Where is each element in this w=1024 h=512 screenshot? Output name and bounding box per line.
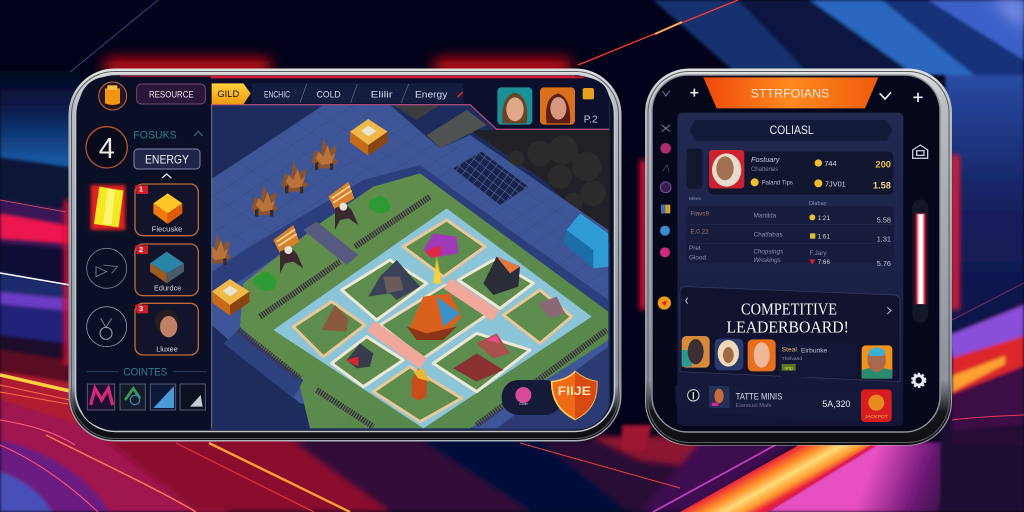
badge capsule (502, 380, 562, 415)
game map (205, 83, 610, 430)
energy button (134, 149, 200, 169)
leaderboard table: 7:66 (818, 259, 830, 266)
player detail card: unp (785, 365, 793, 371)
header banner: STTRFOIANS (751, 87, 829, 101)
counters heading: COINTES (123, 366, 167, 378)
leaderboard table: 5.76 (877, 259, 891, 268)
badge capsule: Guild (519, 402, 528, 406)
leaderboard table: Chatfabas (754, 231, 783, 238)
grass (240, 173, 608, 428)
avatar: player one (497, 87, 532, 125)
header banner (703, 77, 878, 108)
top player row: Fostuary (751, 155, 781, 164)
resource labels: COLD (317, 89, 341, 99)
top resource bar (211, 77, 609, 129)
gold tag: GILD (217, 89, 240, 99)
left colour bands (0, 70, 230, 512)
level circle (86, 127, 127, 168)
avatar: player two (540, 87, 575, 125)
top player row: 1.58 (873, 180, 891, 190)
main panel (660, 77, 928, 426)
player detail card: Eirbunke (801, 347, 828, 354)
glows (105, 60, 270, 72)
resource labels: ENCHIC (264, 89, 290, 99)
energy button: ENERGY (145, 153, 189, 167)
leaderboard table: 1:61 (818, 234, 830, 241)
header icons (662, 89, 923, 102)
card: hero: 3 (139, 304, 143, 313)
icon: yellow energy card (91, 185, 125, 230)
bottom colour fields (100, 435, 800, 512)
leaderboard table: Mites (689, 196, 701, 202)
blue block (567, 213, 608, 268)
leaderboard card: COMPETITIVE (741, 299, 837, 318)
icon: arrow circle (87, 248, 127, 288)
phone: right leaderboard (645, 68, 952, 446)
section title (689, 120, 892, 141)
leaderboard table: 1:21 (818, 215, 830, 222)
leaderboard table: Glood (689, 254, 706, 261)
blue floor (210, 105, 608, 428)
leaderboard table (687, 196, 894, 268)
focus label (133, 130, 203, 142)
leaderboard card: LEADERBOARD! (726, 317, 849, 336)
resource labels (264, 89, 448, 99)
resource labels: Energy (415, 89, 448, 99)
bottom player bar: Elanouel Mafs (736, 403, 772, 409)
fences (238, 197, 607, 427)
player detail card (779, 343, 857, 377)
left sidebar (78, 77, 212, 428)
screen (76, 74, 614, 432)
level circle: 4 (99, 133, 115, 165)
section title: COLIASL (770, 123, 814, 137)
card: resource: 1 (139, 185, 143, 194)
phone: left game screen (68, 68, 622, 442)
buildings (368, 260, 420, 300)
chests (350, 119, 388, 156)
lower wall (223, 330, 303, 398)
icon: settings gear (912, 374, 925, 387)
leaderboard table: Fiavs9 (690, 210, 709, 217)
gold tag (212, 83, 251, 104)
top player row: Paland Tips (762, 181, 793, 187)
bottom player bar: TATTE MINIS (736, 392, 782, 402)
pink crossroad (371, 283, 496, 363)
score text: P.2 (584, 114, 598, 125)
icon: hexagon badge (658, 296, 671, 310)
player detail card: Steal (782, 347, 797, 354)
bottom player bar: 5A,320 (822, 399, 850, 409)
bezel (645, 68, 952, 446)
leaderboard card (680, 287, 900, 382)
card: chest: 2 (139, 245, 143, 254)
fire shield (552, 372, 597, 419)
leaderboard table: Wnskings (753, 257, 782, 264)
top player row: 200 (875, 160, 891, 170)
card: hero (135, 303, 198, 355)
fire shield: FIIJE (558, 384, 591, 398)
bushes (368, 196, 390, 213)
focus label: FOSUKS (133, 130, 177, 142)
bottom player bar: JACKPOT (865, 414, 888, 420)
player detail card: Thrilvand (782, 356, 802, 362)
leaderboard table: E.0.22 (690, 229, 709, 236)
creatures (312, 138, 338, 170)
leaderboard table: 1.31 (877, 235, 891, 244)
leaderboard table: 5.58 (877, 216, 891, 225)
slider (912, 199, 928, 323)
resource pill: RESOURCE (149, 89, 194, 99)
top red rim (120, 76, 575, 78)
icon: ribbon circle (87, 307, 127, 347)
card: resource: Fiecuske (152, 224, 182, 233)
icon: home (913, 145, 928, 158)
side menu icons (660, 125, 671, 257)
leaderboard table: Dlabay (809, 201, 827, 207)
grid block (453, 152, 528, 205)
raised wall shadow (210, 165, 608, 318)
promo panel (658, 287, 925, 422)
top player row: Chatterles (751, 167, 778, 173)
stripe (680, 442, 879, 512)
player avatars (682, 336, 892, 379)
top player row (687, 149, 893, 194)
bottom player bar (676, 385, 892, 422)
paths (273, 208, 592, 428)
plots (293, 220, 572, 422)
gray bunker (427, 110, 487, 148)
icon: gold resource (99, 82, 127, 110)
resource pill (137, 84, 205, 104)
top player row: 7JV01 (825, 180, 846, 189)
card: chest (135, 244, 198, 296)
card: resource (135, 184, 198, 236)
leaderboard table: Pret (689, 245, 701, 252)
top player row: 744 (824, 159, 837, 168)
bezel (68, 68, 622, 442)
icon: gold medal (583, 88, 594, 99)
counters heading (87, 366, 206, 378)
leaderboard table: F.Jary (810, 250, 827, 257)
dark rubble (470, 130, 610, 243)
resource labels: Elilir (371, 89, 393, 99)
right colour fields (622, 0, 1024, 512)
card: hero: Lluxee (156, 344, 178, 353)
thumbnail row (87, 384, 205, 410)
screen (652, 75, 940, 432)
card: chest: Edurdce (154, 284, 181, 293)
leaderboard table: Chopsings (753, 248, 784, 255)
leaderboard table: Martilda (754, 213, 777, 220)
road (303, 222, 358, 265)
